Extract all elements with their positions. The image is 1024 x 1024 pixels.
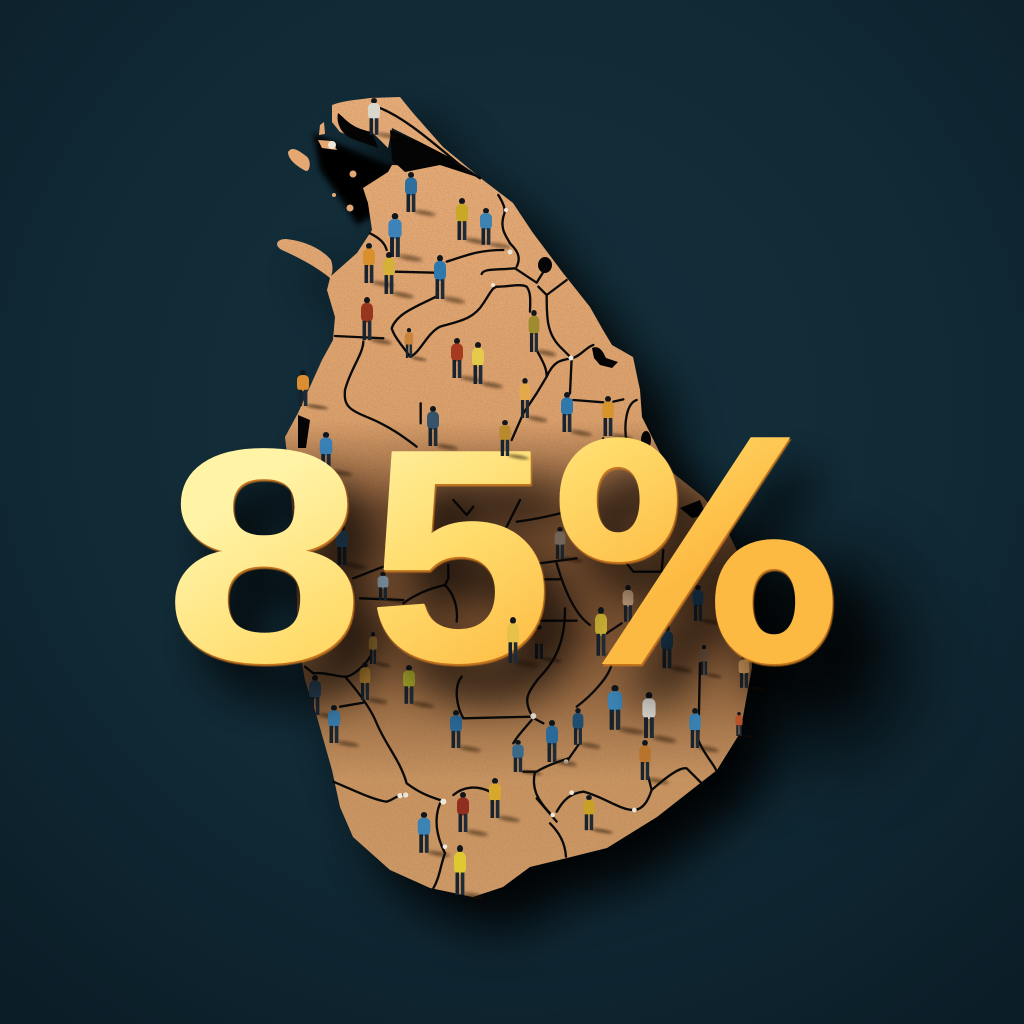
junction markers north (328, 141, 574, 360)
digit 8: 8 (165, 387, 363, 724)
number shade on land (285, 428, 752, 764)
land (277, 97, 752, 897)
people on the map (297, 98, 767, 901)
map drop shadow (309, 131, 784, 931)
figures standing over the number (499, 420, 538, 669)
percent sign: % (549, 390, 843, 721)
figures north (405, 172, 436, 217)
lakes and bays (298, 113, 706, 518)
lagoon shadow (313, 133, 480, 225)
roads south (305, 500, 716, 888)
figures middle (336, 525, 367, 570)
shadow of percent sign on the background (750, 560, 910, 760)
roads north (335, 107, 637, 447)
figure north tip (368, 98, 399, 139)
headline number 85% (165, 387, 843, 724)
islands (288, 122, 356, 212)
map of the island (270, 97, 770, 897)
digit 5: 5 (368, 387, 552, 724)
land texture (277, 97, 752, 897)
figures south (309, 675, 340, 720)
